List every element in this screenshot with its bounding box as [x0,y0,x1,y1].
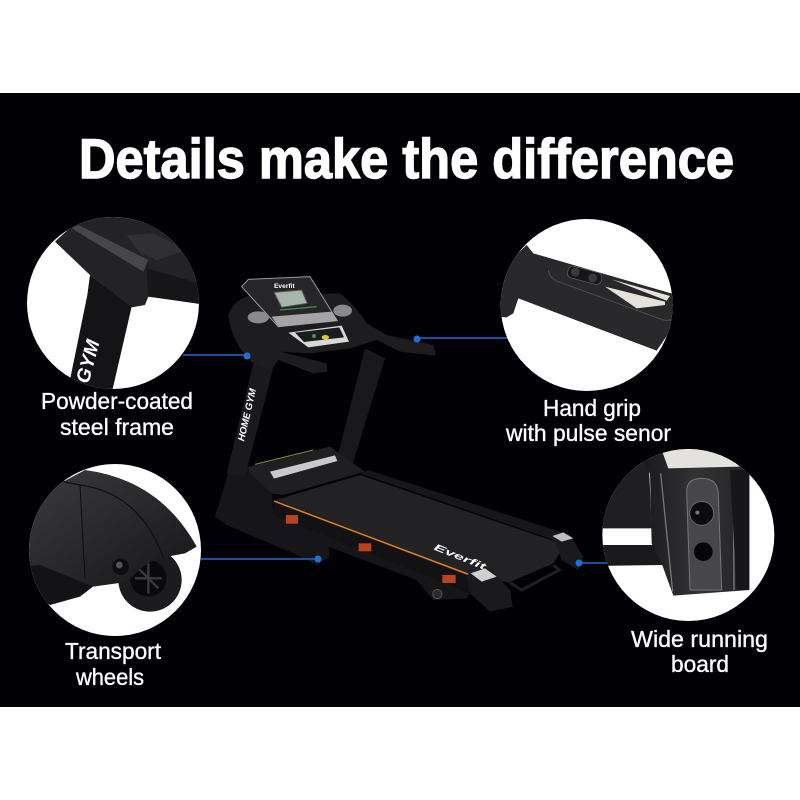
label: hand grip with pulse senor [505,395,671,446]
connector lines and dots [183,336,608,566]
label: hand grip with pulse senor: Hand grip [543,395,641,421]
console body [228,293,436,373]
label: wide running board [631,626,768,677]
label: transport wheels: wheels [75,664,144,690]
label: powder-coated steel frame [41,388,193,440]
right deck rail [360,470,570,543]
label: powder-coated steel frame: Powder-coated [41,388,193,414]
HOME GYM post lettering: HOME GYM [236,387,259,442]
console display panel [242,277,337,327]
title: Details make the difference [79,127,734,190]
rear end caps [467,532,583,612]
label: hand grip with pulse senor: with pulse senor [505,420,671,446]
detail circle: steel frame: GYM [73,337,105,386]
detail circle: running board [597,449,774,621]
keypad [288,326,349,347]
detail circle: steel frame [27,217,199,389]
detail circle: transport wheels [20,464,201,636]
speakers [248,305,352,323]
right upright post [337,348,385,464]
label: transport wheels [65,638,162,690]
orange deck stripe [274,501,468,574]
console display panel: Everfit [274,283,295,290]
side wheel [433,589,442,599]
label: wide running board: board [671,651,729,677]
Everfit belt logo: Everfit [433,542,489,572]
rear handle [510,565,559,590]
treadmill [215,277,583,612]
detail circle: hand grip [497,219,677,391]
black background panel [0,93,800,707]
running belt [275,475,565,583]
treadmill frame base [215,468,470,600]
orange side tags [286,515,456,583]
motor cover [247,447,365,495]
label: transport wheels: Transport [65,638,162,664]
left upright post [227,363,273,477]
label: wide running board: Wide running [631,626,768,652]
deck side rail [273,502,472,593]
label: powder-coated steel frame: steel frame [60,414,174,440]
